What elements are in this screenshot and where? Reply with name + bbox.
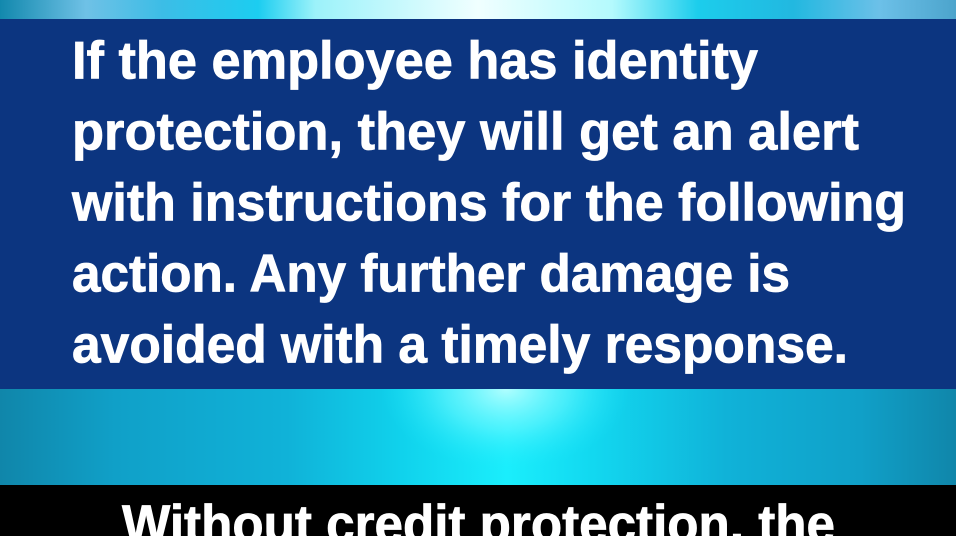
middle gradient band — [0, 389, 956, 485]
panel: credit protection message — [0, 485, 956, 536]
top gradient band — [0, 0, 956, 19]
text block: identity protection alert: If the employee has identity — [72, 32, 759, 90]
text block: identity protection alert — [71, 32, 906, 374]
text block: identity protection alert: action. Any further damage is — [72, 244, 790, 304]
text block: identity protection alert: with instructions for the following — [71, 174, 906, 232]
text block: identity protection alert: avoided with a timely response. — [72, 316, 848, 374]
text block: identity protection alert: protection, they will get an alert — [72, 102, 859, 162]
panel: identity protection message — [0, 19, 956, 389]
